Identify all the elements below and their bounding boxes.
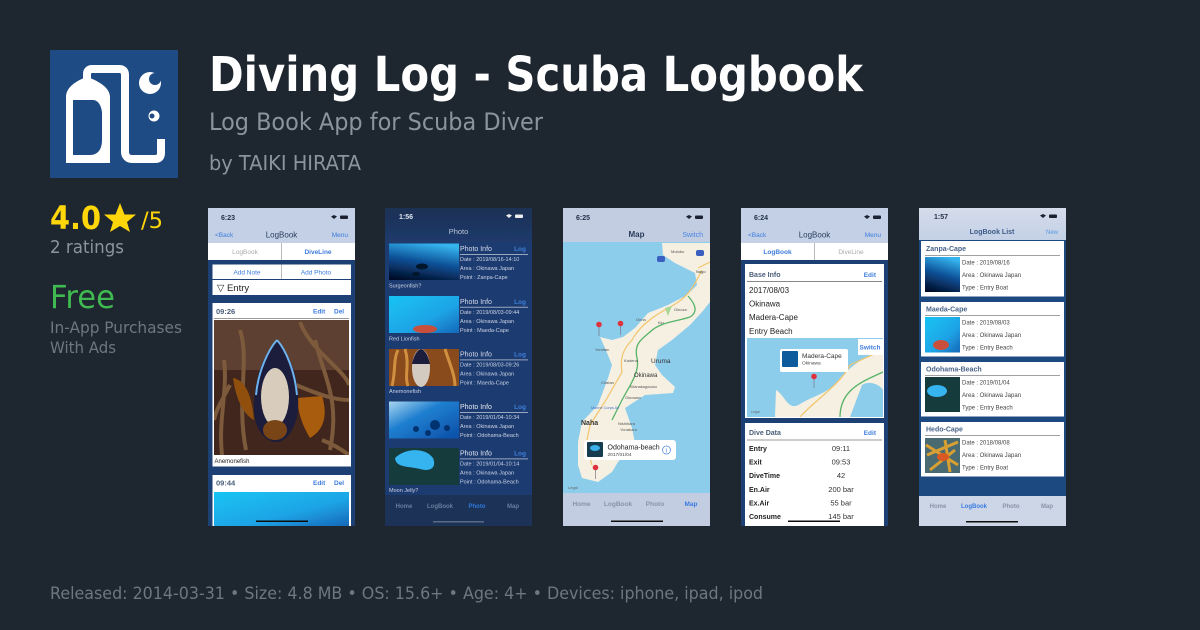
tab bar: Home <box>930 504 947 510</box>
price <box>50 278 182 357</box>
photo row 1: Date : 2019/08/16-14:10 <box>460 257 519 263</box>
screenshot 5: logbook list: New <box>1046 230 1059 236</box>
map area: Yonabaru <box>620 427 637 432</box>
photo row 5: Log <box>514 450 526 458</box>
photo row 1 <box>389 244 528 290</box>
log card 2 <box>921 302 1064 356</box>
map area: Okinawa <box>634 373 658 379</box>
photo row 3: Area : Okinawa Japan <box>460 372 514 378</box>
tab bar: Map <box>684 501 698 508</box>
photo row 4: Point : Odohama-Beach <box>460 433 519 439</box>
log card 3 <box>921 362 1064 416</box>
photo row 3 <box>389 349 528 395</box>
subtitle: Log Book App for Scuba Diver <box>209 108 543 136</box>
map callout: i <box>666 448 667 454</box>
dive data card: Entry <box>749 446 767 453</box>
photo row 2: Red Lionfish <box>389 336 420 342</box>
log card 2: Date : 2019/08/03 <box>962 320 1010 326</box>
photo row 2: Date : 2019/08/03-09:44 <box>460 310 519 316</box>
screenshot 2: photo list <box>385 208 532 526</box>
screenshot 1: dive line: Del <box>334 480 344 487</box>
log card 3: Date : 2019/01/04 <box>962 380 1010 386</box>
base info card: Legal <box>751 410 760 414</box>
tab bar: Map <box>507 504 519 510</box>
map area: Ginoza <box>674 307 687 312</box>
rating <box>50 199 163 258</box>
dive data card: 09:11 <box>832 444 850 453</box>
log card 1: Area : Okinawa Japan <box>962 273 1021 279</box>
photo row 1: Log <box>514 246 526 253</box>
photo row 5: Point : Odohama-Beach <box>460 480 519 486</box>
price: With Ads <box>50 338 116 357</box>
log card 4: Area : Okinawa Japan <box>962 453 1021 459</box>
dive data card: DiveTime <box>749 473 780 480</box>
photo row 2: Point : Maeda-Cape <box>460 328 509 334</box>
map area: Marine Corps Air <box>591 406 620 410</box>
tab bar: Home <box>572 501 591 508</box>
dive data card: Edit <box>864 430 877 437</box>
log card 3: Area : Okinawa Japan <box>962 393 1021 399</box>
log card 2: Maeda-Cape <box>926 306 967 314</box>
log card 3: Odohama-Beach <box>926 366 982 374</box>
screenshot 3: map: Switch <box>682 232 703 239</box>
map area: Naha <box>581 420 598 427</box>
photo row 5: Moon Jelly? <box>389 488 418 494</box>
photo row 4 <box>389 402 528 439</box>
map area: Nago <box>696 269 706 274</box>
screenshot 1: dive line: 6:23 <box>221 215 235 222</box>
base info card: Edit <box>864 272 877 279</box>
dive data card: En.Air <box>749 487 770 494</box>
base info card: Okinawa <box>802 360 821 366</box>
rating: 2 ratings <box>50 237 124 258</box>
screenshot 1: dive line: <Back <box>215 232 234 239</box>
photo row 3: Log <box>514 352 526 358</box>
map area: Onna <box>636 317 647 322</box>
map area <box>563 242 710 495</box>
screenshot 2: photo list: Photo <box>449 227 468 236</box>
dive data card: 145 bar <box>828 512 854 521</box>
screenshot 3: map: 6:25 <box>576 215 590 222</box>
tab bar <box>919 496 1066 526</box>
log card 4: Type : Entry Boat <box>962 466 1008 472</box>
photo row 4: Date : 2019/01/04-10:34 <box>460 415 519 421</box>
screenshot 4: logbook detail: DiveLine <box>838 249 864 256</box>
photo row 4: Area : Okinawa Japan <box>460 424 514 430</box>
screenshot 4: logbook detail: Menu <box>865 232 881 239</box>
dive data card: Consume <box>749 514 781 521</box>
screenshot 1: dive line: Anemonefish <box>214 459 250 465</box>
photo row 5: Area : Okinawa Japan <box>460 470 514 476</box>
price: Free <box>50 278 115 316</box>
log card 1: Type : Entry Boat <box>962 286 1008 292</box>
screenshot 1: dive line: Add Photo <box>301 270 332 276</box>
rating: /5 <box>141 209 163 234</box>
photo row 1: Photo Info <box>460 246 492 253</box>
dive data card: 09:53 <box>832 458 850 466</box>
screenshot 4: logbook detail: <Back <box>748 232 767 239</box>
footer metadata: Released: 2014-03-31 • Size: 4.8 MB • OS: 15.6+ • Age: 4+ • Devices: iphone, ipad, ipod <box>50 584 763 603</box>
base info card <box>745 264 884 418</box>
base info card: 2017/08/03 <box>749 286 790 295</box>
photo row 5: Date : 2019/01/04-10:14 <box>460 462 519 468</box>
log card 3: Type : Entry Beach <box>962 406 1013 412</box>
screenshot 1: dive line: Del <box>334 308 344 316</box>
screenshot 1: dive line: LogBook <box>232 249 259 256</box>
log card 2: Type : Entry Beach <box>962 346 1013 352</box>
photo row 2: Area : Okinawa Japan <box>460 319 514 325</box>
map area: Yomitan <box>595 347 609 352</box>
app icon <box>50 50 178 178</box>
map area: Kitanakagusuku <box>630 385 657 389</box>
tab bar: Photo <box>468 504 486 510</box>
infographic canvas <box>50 50 1066 602</box>
tab bar: LogBook <box>961 504 988 510</box>
map area: Ginowan <box>625 395 641 400</box>
log card 1: Date : 2019/08/16 <box>962 260 1010 266</box>
screenshot 1: dive line: Edit <box>313 480 326 487</box>
photo row 3: Anemonefish <box>389 389 421 395</box>
screenshot 1: dive line: Edit <box>313 308 326 316</box>
tab bar: Photo <box>646 501 664 508</box>
screenshot 3: map: Map <box>628 230 645 239</box>
tab bar: Home <box>396 504 413 510</box>
screenshot 1: dive line <box>208 208 355 526</box>
tab bar: Photo <box>1002 504 1020 510</box>
screenshot 1: dive line: 09:26 <box>216 307 235 316</box>
tab bar: LogBook <box>604 501 632 508</box>
title: Diving Log - Scuba Logbook <box>209 47 864 103</box>
photo row 4: Log <box>514 404 526 411</box>
dive data card: 55 bar <box>830 498 852 508</box>
photo row 3: Date : 2019/08/03-09:26 <box>460 362 519 368</box>
screenshot 1: dive line: Menu <box>332 232 348 239</box>
base info card: Switch <box>860 344 881 352</box>
log card 4: Hedo-Cape <box>926 426 963 434</box>
rating: 4.0 <box>50 199 101 237</box>
developer: by TAIKI HIRATA <box>209 151 361 175</box>
screenshot 3: map <box>563 208 710 526</box>
tab bar <box>563 493 710 526</box>
tab bar <box>385 495 532 526</box>
dive data card: Ex.Air <box>749 500 770 508</box>
dive data card: 42 <box>837 471 845 480</box>
dive data card: Exit <box>749 460 763 466</box>
photo row 1: Surgeonfish? <box>389 284 421 290</box>
map callout: 2017/01/04 <box>608 452 632 458</box>
photo row 5: Photo Info <box>460 450 492 458</box>
dive data card: Dive Data <box>749 430 781 437</box>
photo row 3: Point : Maeda-Cape <box>460 380 509 386</box>
photo row 1: Point : Zanpa-Cape <box>460 275 508 281</box>
log card 2: Area : Okinawa Japan <box>962 333 1021 339</box>
dive data card <box>745 423 884 526</box>
screenshot 4: logbook detail: LogBook <box>799 230 831 240</box>
map pins <box>593 321 623 479</box>
screenshot 5: logbook list <box>919 208 1066 526</box>
photo row 2: Log <box>514 299 526 306</box>
screenshot 5: logbook list: 1:57 <box>934 214 948 221</box>
map area: Kin <box>658 320 664 325</box>
map callout: Odohama-beach <box>608 444 660 452</box>
photo row 4: Photo Info <box>460 404 492 411</box>
base info card: Base Info <box>749 272 781 279</box>
screenshot 5: logbook list: LogBook List <box>970 229 1015 236</box>
map callout <box>584 440 676 460</box>
screenshot 1: dive line: ▽ Entry <box>217 283 249 294</box>
tab bar: Map <box>1041 504 1053 510</box>
log card 4: Date : 2018/08/08 <box>962 440 1010 446</box>
base info card: Okinawa <box>749 300 781 308</box>
screenshot 2: photo list: 1:56 <box>399 214 413 221</box>
dive data card: 200 bar <box>828 485 854 494</box>
photo row 3: Photo Info <box>460 352 492 358</box>
base info card: Madera-Cape <box>749 313 798 322</box>
anemonefish photo <box>214 320 349 455</box>
map area: Nishihara <box>618 421 636 426</box>
map area: Kadena <box>624 358 639 363</box>
photo row 2: Photo Info <box>460 299 492 306</box>
map area: Legal <box>568 485 578 490</box>
base info card: Madera-Cape <box>802 353 842 360</box>
photo row 1: Area : Okinawa Japan <box>460 266 514 272</box>
map area: Chatan <box>601 380 614 385</box>
screenshot 1: dive line: LogBook <box>266 230 298 240</box>
screenshot 4: logbook detail: LogBook <box>763 249 792 256</box>
tab bar: LogBook <box>427 504 454 510</box>
screenshot 1: dive line: Add Note <box>233 270 261 276</box>
screenshot 4: logbook detail <box>741 208 888 526</box>
screenshot 4: logbook detail: 6:24 <box>754 215 768 222</box>
price: In-App Purchases <box>50 318 182 337</box>
photo row 2 <box>389 296 528 342</box>
log card 1: Zanpa-Cape <box>926 246 966 253</box>
base info card: Entry Beach <box>749 327 793 336</box>
log card 1 <box>921 241 1064 296</box>
map area: Motobu <box>671 249 684 254</box>
map area: Uruma <box>651 358 671 365</box>
log card 4 <box>921 422 1064 476</box>
screenshot 1: dive line: DiveLine <box>304 249 332 256</box>
photo row 5 <box>389 448 528 494</box>
screenshot 1: dive line: 09:44 <box>216 478 236 488</box>
